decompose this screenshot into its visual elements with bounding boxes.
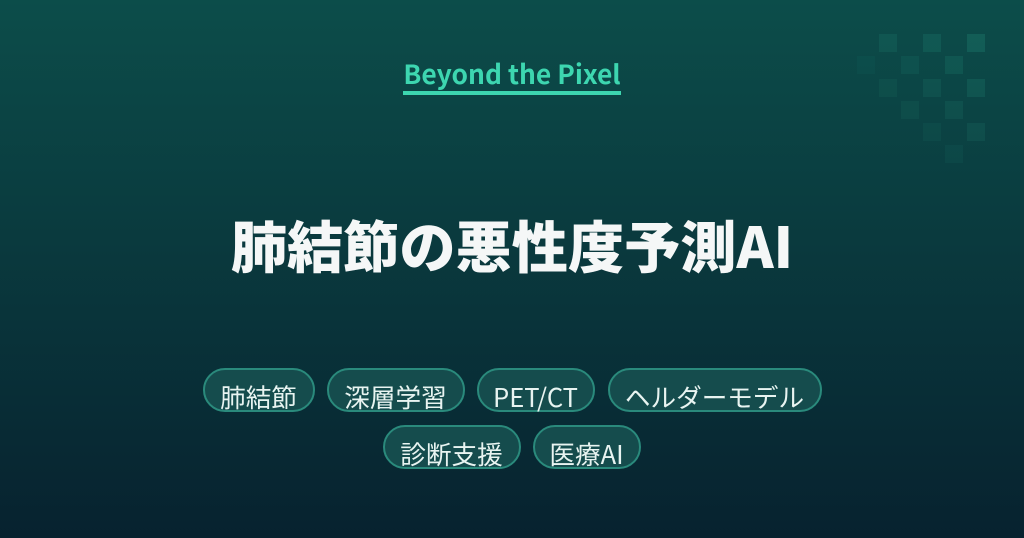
title: 肺結節の悪性度予測AI	[231, 204, 793, 285]
tag: PET/CT: PET/CT	[493, 378, 578, 415]
tag: lung nodule: 肺結節	[220, 378, 297, 415]
tag: medical AI	[533, 425, 641, 469]
tag: deep learning	[327, 368, 465, 412]
decorative square pattern	[879, 34, 985, 141]
tag: Halder model: ヘルダーモデル	[625, 378, 804, 415]
tag: diagnosis support: 診断支援	[400, 435, 503, 472]
tag: deep learning: 深層学習	[344, 378, 447, 415]
tag: Halder model	[608, 368, 822, 412]
brand underline	[403, 91, 621, 95]
tag: medical AI: 医療AI	[549, 435, 624, 472]
tag: lung nodule	[203, 368, 315, 412]
brand label: Beyond the Pixel	[403, 53, 621, 92]
tag: diagnosis support	[383, 425, 521, 469]
tag: PET/CT	[477, 368, 595, 412]
